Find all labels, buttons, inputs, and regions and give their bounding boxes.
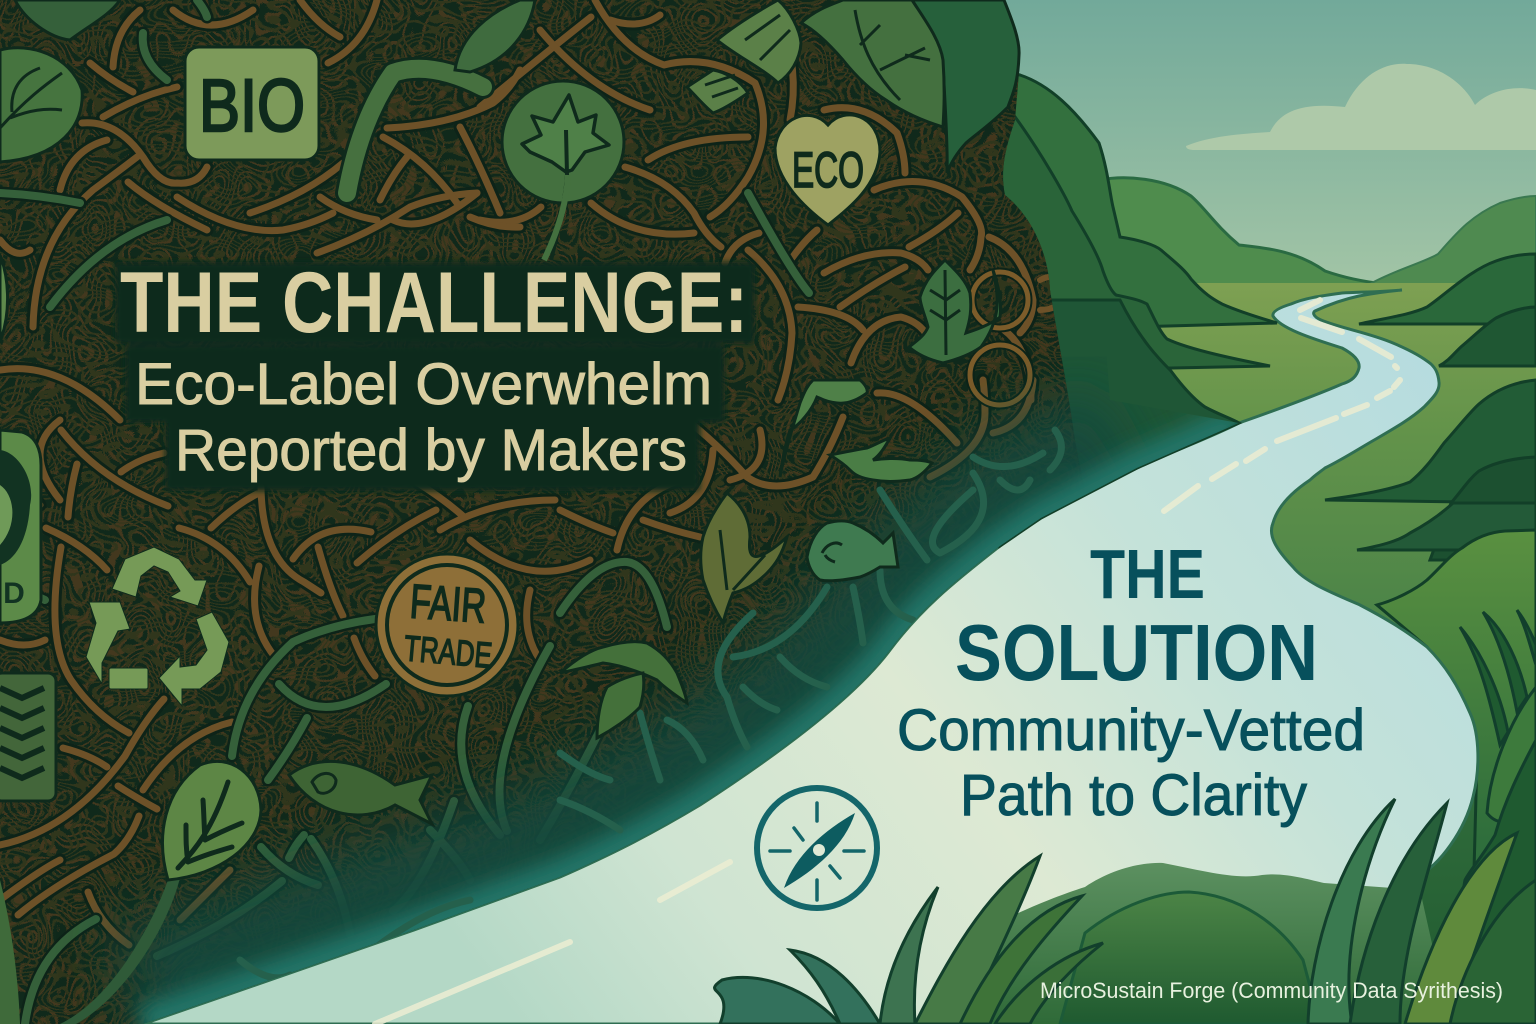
- leaf: far top right dark: [912, 0, 1019, 173]
- leaf: left edge: [0, 255, 8, 342]
- heading: the: THE: [1090, 535, 1205, 613]
- sprout: [780, 380, 867, 477]
- subtitle line 1: Eco-Label Overwhelm: [135, 352, 712, 417]
- leaf: mid right: [830, 438, 932, 482]
- hill: pale mound: [985, 863, 1450, 1024]
- leaves: bell drooping: [560, 642, 687, 738]
- hill: far left: [1100, 178, 1385, 290]
- grass blades: [715, 610, 1536, 1024]
- hills: right side layers: [1325, 254, 1536, 1024]
- leaf: spinach with stem: [60, 761, 261, 1024]
- heading: the challenge: THE CHALLENGE:: [120, 255, 748, 351]
- leaf: small under vine: [687, 70, 748, 113]
- bush hills lower right: [985, 863, 1450, 1024]
- cloud: [1186, 64, 1536, 150]
- leaf: upper centre left: [455, 0, 535, 72]
- leaf: olive pair: [701, 493, 787, 623]
- badge: fair trade: FAIR: [408, 575, 488, 634]
- dark plate behind challenge text: [115, 262, 755, 491]
- leaf: top left: [0, 48, 82, 162]
- fish: upper right: [807, 521, 898, 581]
- sky: [0, 0, 1536, 290]
- fine tangle texture: [0, 0, 1100, 1024]
- hills: left side layers: [1000, 70, 1277, 546]
- subtitle line 2: Path to Clarity: [960, 763, 1307, 828]
- subtitle line 2: Reported by Makers: [175, 418, 687, 483]
- solution title: [897, 535, 1365, 828]
- badge: BIO: BIO: [199, 64, 305, 147]
- teal fade toward river: [143, 423, 1239, 1024]
- teal vines: [240, 430, 1061, 978]
- knots over the hillside: [970, 272, 1066, 405]
- icon: recycling arrows: [86, 547, 229, 706]
- badge: BIO: [185, 47, 319, 160]
- subtitle line 1: Community-Vetted: [897, 698, 1365, 763]
- river: [143, 290, 1478, 1024]
- thick green vine near BIO: [347, 69, 483, 193]
- badge: left chevrons: [0, 673, 56, 801]
- hill: far right: [1370, 196, 1536, 290]
- leaf: top right large: [801, 0, 944, 127]
- river centre dashes: [375, 300, 1400, 1024]
- badge: ECO heart: ECO: [792, 142, 864, 198]
- leaves in the tangle: [0, 0, 1019, 738]
- leaf: top left upper: [15, 0, 120, 40]
- badge: leaf circle: [502, 81, 624, 260]
- source credit: MicroSustain Forge (Community Data Syrithesis): [1040, 978, 1503, 1003]
- background hills: [1100, 178, 1536, 290]
- badge: fair trade: TRADE: [402, 627, 494, 676]
- hill: inner mound: [1060, 892, 1320, 1024]
- heading: solution: SOLUTION: [955, 608, 1318, 697]
- leaf: lower left stalk: [0, 880, 20, 1024]
- challenge title: [120, 255, 748, 483]
- icon: compass: [757, 788, 877, 908]
- badge: ECO heart: [775, 115, 880, 225]
- leaf: right side veined: [909, 260, 1001, 363]
- large vines: [0, 0, 1033, 1024]
- fish: [289, 761, 432, 824]
- badge: left tag: [0, 430, 41, 623]
- badge: left tag: D: [3, 577, 25, 610]
- leaf: top centre: [717, 0, 801, 83]
- badge: fair trade: [376, 554, 518, 696]
- meadow and river banks: [1130, 283, 1536, 1024]
